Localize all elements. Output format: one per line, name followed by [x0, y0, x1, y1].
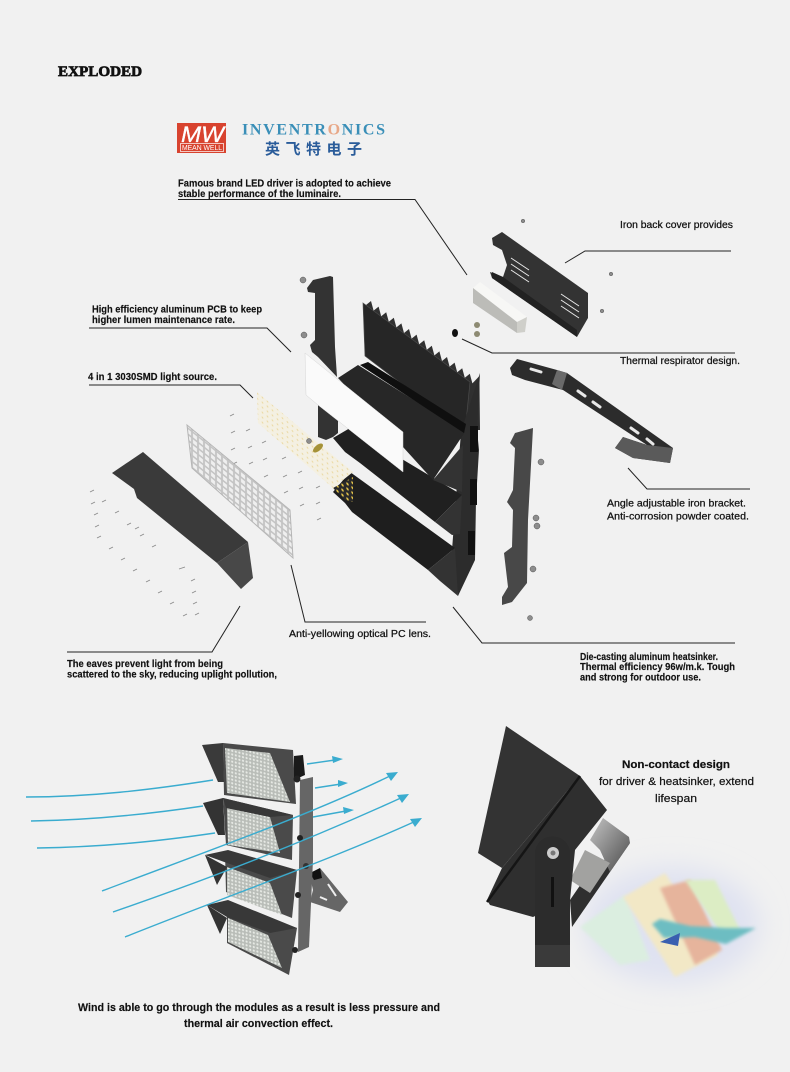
upright iron bracket — [502, 428, 544, 620]
callout: eaves: The eaves prevent light from being — [67, 659, 223, 670]
callout: light source: 4 in 1 3030SMD light source. — [88, 372, 217, 383]
module 3 — [205, 850, 297, 918]
left rear bracket — [307, 276, 338, 440]
scattered lens screws — [90, 414, 321, 616]
callout: thermal respirator — [462, 339, 740, 367]
logo: Inventronics: INVENTRONICS — [242, 122, 385, 138]
side view text — [599, 759, 754, 805]
callout: eaves — [67, 606, 277, 680]
wind lamp — [26, 743, 422, 975]
callout: heatsinker — [453, 607, 735, 684]
callout: angle bracket: Anti-corrosion powder coated. — [607, 510, 749, 522]
callout: iron back cover: Iron back cover provides — [620, 219, 733, 231]
side view text: for driver & heatsinker, extend — [599, 776, 754, 788]
heat simulation — [580, 867, 760, 983]
logo: Inventronics: 英飞特电子 — [265, 138, 362, 159]
callout: iron back cover — [565, 219, 733, 263]
LED driver — [473, 282, 527, 333]
mount arm — [535, 837, 570, 967]
callout: aluminum PCB: higher lumen maintenance rate. — [92, 315, 235, 326]
PC lens — [187, 425, 293, 558]
callout: PC lens: Anti-yellowing optical PC lens. — [289, 628, 431, 640]
exploded view — [90, 219, 673, 620]
logo: Mean Well: MEAN WELL — [182, 145, 222, 152]
frame edge — [487, 776, 580, 902]
callout: LED driver: stable performance of the luminaire. — [178, 189, 341, 200]
eave — [112, 452, 253, 589]
callout: LED driver: Famous brand LED driver is adopted to achieve — [178, 178, 391, 190]
heat sink fins — [366, 301, 480, 430]
vertical mount bracket — [292, 776, 313, 953]
light source board — [257, 392, 353, 502]
module 1 — [202, 743, 305, 804]
callout: angle bracket — [607, 468, 750, 522]
aluminum PCB — [305, 353, 403, 472]
callout: thermal respirator: Thermal respirator design. — [620, 355, 740, 367]
iron back cover — [490, 232, 588, 337]
callout: heatsinker: Thermal efficiency 96w/m.k. Tough — [580, 662, 735, 673]
logo: Mean Well: MW — [181, 122, 226, 147]
callout: LED driver — [178, 178, 467, 275]
thermal respirator and screws — [300, 219, 613, 338]
callout: eaves: scattered to the sky, reducing uplight pollution, — [67, 670, 277, 680]
heat sink panel — [363, 303, 470, 432]
module 4 — [207, 900, 297, 975]
callout: angle bracket: Angle adjustable iron bracket. — [607, 498, 746, 510]
module 2 — [203, 798, 293, 860]
side view text: lifespan — [655, 793, 697, 805]
callout: aluminum PCB — [89, 304, 291, 352]
rear bracket — [570, 818, 630, 927]
side view text: Non-contact design — [622, 759, 730, 771]
angle adjustable bracket — [510, 359, 673, 463]
housing body — [487, 776, 607, 917]
side view lamp — [478, 726, 760, 983]
rear arm — [310, 868, 348, 912]
callout: heatsinker: Die-casting aluminum heatsinker. — [580, 652, 718, 663]
wind caption: Wind is able to go through the modules as a result is less pressure and — [78, 1002, 440, 1014]
wind caption — [78, 1002, 440, 1030]
eave panel — [478, 726, 580, 868]
logo: Inventronics — [242, 122, 385, 159]
logo: Mean Well — [177, 122, 226, 153]
callout: aluminum PCB: High efficiency aluminum PCB to keep — [92, 304, 262, 316]
right connector column — [452, 373, 480, 596]
module 2 — [333, 428, 462, 535]
callout: PC lens — [289, 565, 431, 640]
module 3 — [333, 472, 458, 596]
wind arrows — [26, 756, 422, 937]
callout: light source — [88, 372, 253, 398]
wind caption: thermal air convection effect. — [184, 1018, 333, 1030]
module 1 — [338, 362, 466, 492]
callout: heatsinker: and strong for outdoor use. — [580, 672, 701, 684]
title: EXPLODED — [58, 64, 142, 80]
driver box — [570, 850, 610, 893]
